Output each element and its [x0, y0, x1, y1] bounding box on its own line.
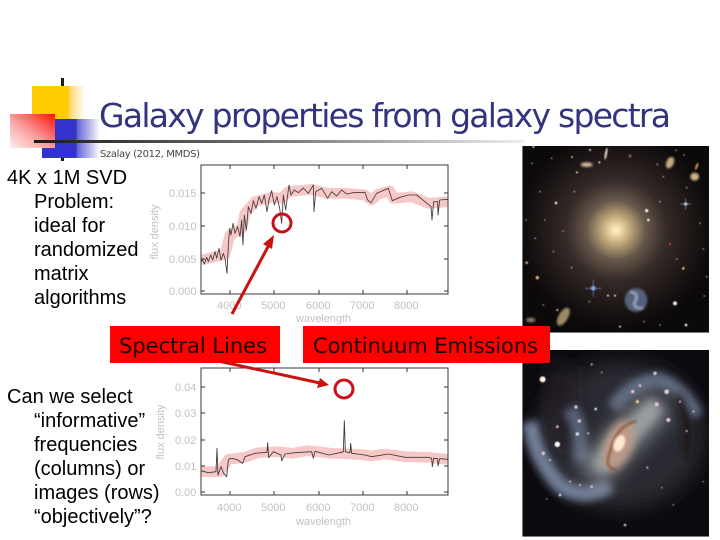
axis labels: 0.01 [175, 461, 196, 473]
text block: SVD problem: ideal for [34, 215, 105, 237]
callout: Spectral Lines [110, 326, 280, 363]
spectrum trace [201, 185, 448, 273]
arrow: to spectral line marker [232, 235, 274, 314]
axis labels: 8000 [394, 300, 418, 312]
axis labels: flux density [149, 204, 161, 260]
axis labels: 7000 [350, 300, 374, 312]
axis labels: 0.00 [175, 487, 196, 499]
photo: elliptical galaxy [522, 146, 709, 333]
axis labels: 6000 [306, 300, 330, 312]
axis labels: 4000 [217, 502, 241, 514]
text block: selection question: frequencies [34, 434, 137, 456]
axis labels: 0.02 [175, 435, 196, 447]
axis labels [155, 382, 418, 528]
logo: overlapping colour squares [10, 78, 100, 161]
marker: emission line circle [335, 380, 353, 398]
callout: Spectral Lines: Spectral Lines [119, 334, 267, 358]
axis labels: 6000 [306, 502, 330, 514]
photo: barred spiral galaxy [522, 350, 709, 537]
axis labels: 0.010 [169, 221, 197, 233]
axis labels: 0.03 [175, 408, 196, 420]
text block: selection question: “objectively”? [34, 506, 152, 528]
subtitle credit: Szalay (2012, MMDS) [100, 149, 200, 160]
text block: SVD problem: randomized [34, 239, 139, 261]
text block: SVD problem: Problem: [34, 191, 114, 213]
text block: SVD problem: algorithms [34, 287, 126, 309]
axis labels: 8000 [394, 502, 418, 514]
text block: SVD problem [7, 167, 139, 309]
text block: selection question: images (rows) [34, 482, 160, 504]
spectrum trace [201, 421, 448, 477]
text block: selection question: “informative” [34, 410, 145, 432]
axis labels: 4000 [217, 300, 241, 312]
text block: SVD problem: 4K x 1M SVD [7, 167, 127, 189]
axis labels: wavelength [295, 313, 351, 325]
title underline rule [34, 140, 524, 143]
axis labels: 0.015 [169, 188, 197, 200]
axis ticks [201, 368, 448, 495]
axis labels: 0.04 [175, 382, 196, 394]
axis labels: 7000 [350, 502, 374, 514]
arrow: to emission line marker [218, 361, 329, 388]
text block: selection question [7, 386, 160, 528]
axis ticks [201, 165, 448, 294]
text block: selection question: (columns) or [34, 458, 145, 480]
heading: Galaxy properties from galaxy spectra [99, 96, 671, 135]
axis labels [149, 188, 418, 325]
uncertainty band [202, 189, 448, 260]
axis labels: wavelength [295, 516, 351, 528]
axis labels: 5000 [261, 502, 285, 514]
chart: upper spectrum, spectral lines [149, 165, 448, 325]
chart: lower spectrum, continuum emission [155, 368, 448, 528]
callout: Continuum Emissions: Continuum Emissions [313, 334, 538, 358]
axis labels: flux density [155, 404, 167, 460]
axis labels: 0.000 [169, 286, 197, 298]
text block: selection question: Can we select [7, 386, 133, 408]
text block: SVD problem: matrix [34, 263, 88, 285]
marker: spectral line circle [273, 214, 291, 232]
uncertainty band [201, 451, 448, 472]
axis labels: 0.005 [169, 254, 197, 266]
callout: Continuum Emissions [303, 326, 550, 363]
axis labels: 5000 [261, 300, 285, 312]
